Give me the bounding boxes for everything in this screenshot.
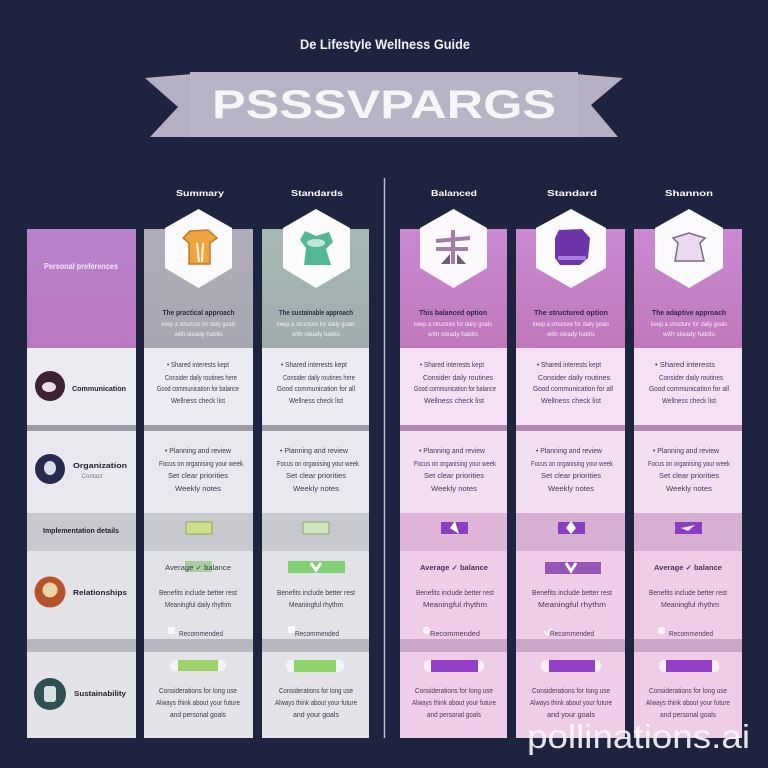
row 3 text — [277, 590, 355, 609]
header text — [162, 310, 236, 338]
icon: row 3 — [34, 576, 66, 608]
row 2 text: Weekly notes — [431, 486, 478, 493]
row 4 text: and personal goals — [427, 712, 481, 719]
checkbox item — [658, 627, 713, 638]
row 2 text: • Planning and review — [165, 448, 232, 455]
row 2 text: Focus on organising your week — [414, 461, 496, 468]
header text: keep a structure for daily goals — [651, 321, 728, 328]
column label: Balanced — [431, 189, 477, 198]
header text: with steady habits — [546, 331, 596, 338]
row 3 text — [416, 590, 494, 609]
row 4 text: and personal goals — [170, 712, 226, 719]
row 2 text: Focus on organising your week — [648, 461, 730, 468]
row 1 text: Wellness check list — [171, 398, 225, 405]
row 1 text: Consider daily routines — [659, 375, 723, 382]
label: heading: Personal preferences — [44, 262, 119, 271]
watermark: pollinations.ai — [527, 718, 750, 755]
row 3 text: Meaningful daily rhythm — [165, 602, 231, 609]
row 4 text: Always think about your future — [275, 700, 357, 707]
tag with check: Average ✓ balance — [165, 565, 231, 572]
row 3 text: Benefits include better rest — [159, 590, 237, 597]
row 2 text: Focus on organising your week — [159, 461, 243, 468]
row 4 text: Considerations for long use — [415, 688, 493, 695]
tag with check: Average ✓ balance — [420, 565, 488, 572]
label: row 2 — [73, 463, 127, 480]
header text: keep a structure for daily goals — [533, 321, 610, 328]
row 1 text: Consider daily routines here — [165, 375, 237, 382]
checkbox item: Recommended — [669, 631, 713, 638]
title: PSSSVPARGS — [212, 83, 556, 127]
title ribbon banner — [145, 72, 623, 137]
column 1: neutral — [144, 189, 253, 738]
row 2 text: Set clear priorities — [541, 473, 602, 480]
row 1 text: Good communication for balance — [414, 386, 496, 393]
hexagon icon: green bag — [283, 209, 350, 288]
row 2 text: • Planning and review — [419, 448, 486, 455]
row 3 text: Meaningful rhythm — [538, 602, 606, 609]
header text — [277, 310, 356, 338]
progress bar — [424, 660, 484, 672]
row 2 text: Weekly notes — [666, 486, 713, 493]
row 1 text: • Shared interests kept — [537, 362, 601, 369]
progress bar — [659, 660, 719, 672]
column 5: purple — [634, 189, 742, 738]
row 2 text: • Planning and review — [653, 448, 720, 455]
row 4 text — [156, 688, 240, 719]
row 2 text: Set clear priorities — [286, 473, 347, 480]
badge — [186, 522, 212, 534]
header text: The practical approach — [162, 310, 234, 317]
row 2 text: Weekly notes — [548, 486, 595, 493]
row 4 text: Considerations for long use — [649, 688, 727, 695]
label: row 1: Communication — [72, 386, 126, 393]
row 1 text: • Shared interests kept — [281, 362, 347, 369]
tag with check — [288, 561, 345, 573]
row 4 text: Considerations for long use — [532, 688, 610, 695]
row 1 text: • Shared interests kept — [167, 362, 229, 369]
center divider line — [384, 178, 386, 738]
hexagon icon: cross sign — [420, 209, 487, 288]
row 4 text — [530, 688, 612, 719]
row 3 text: Benefits include better rest — [416, 590, 494, 597]
header text — [651, 310, 728, 338]
row 3 text: Meaningful rhythm — [289, 602, 343, 609]
header text: keep a structure for daily goals — [277, 321, 356, 328]
row 4 text: and your goals — [293, 712, 339, 719]
label: band: Implementation details — [43, 528, 119, 535]
header text: keep a structure for daily goals — [414, 321, 493, 328]
label: row 3: Relationships — [73, 590, 127, 597]
row 1 text — [533, 362, 613, 405]
row 3 text: Benefits include better rest — [532, 590, 612, 597]
column label: Shannon — [665, 189, 713, 198]
row 2 text — [277, 448, 359, 493]
badge — [441, 521, 468, 534]
icon: row 4 — [34, 678, 66, 710]
column label: Summary — [176, 189, 225, 198]
hexagon icon: violet pouch — [536, 209, 606, 288]
row 1 text: Good communication for all — [277, 386, 355, 393]
label: row 4: Sustainability — [74, 691, 126, 698]
tag with check — [165, 561, 231, 572]
header text: with steady habits — [427, 331, 479, 338]
label: row 2: Organization — [73, 463, 127, 470]
row 2 text: Set clear priorities — [659, 473, 720, 480]
column label: Standards — [291, 189, 344, 198]
column 3: purple — [400, 189, 507, 738]
row 1 text — [277, 362, 355, 405]
progress bar — [286, 660, 344, 672]
checkbox item — [288, 626, 339, 638]
checkbox item: Recommended — [550, 631, 594, 638]
hexagon icon: lilac jar — [655, 209, 723, 288]
row 4 text: Considerations for long use — [279, 688, 353, 695]
row 1 text: Wellness check list — [289, 398, 343, 405]
row 2 text — [159, 448, 243, 493]
row 2 text: • Planning and review — [536, 448, 603, 455]
row 4 text: Always think about your future — [156, 700, 240, 707]
icon: row 1 — [35, 371, 65, 401]
row 1 text — [649, 362, 729, 405]
row 4 text: and personal goals — [660, 712, 716, 719]
header text: The structured option — [534, 310, 608, 317]
header text: This balanced option — [419, 310, 487, 317]
checkbox item — [544, 628, 594, 638]
row 4 text: Always think about your future — [412, 700, 496, 707]
row 1 text: Good communication for all — [533, 386, 613, 393]
header text — [414, 310, 493, 338]
row 2 text: Focus on organising your week — [531, 461, 613, 468]
row 1 text: • Shared interests kept — [420, 362, 484, 369]
row 1 text: Consider daily routines here — [283, 375, 355, 382]
row 3 text — [159, 590, 237, 609]
row 4 text — [646, 688, 730, 719]
subtitle: De Lifestyle Wellness Guide — [300, 36, 470, 52]
row 4 text: and your goals — [547, 712, 596, 719]
row 1 text: Wellness check list — [662, 398, 716, 405]
row 4 text: Always think about your future — [646, 700, 730, 707]
row 3 text — [649, 590, 727, 609]
row 1 text — [414, 362, 496, 405]
row 3 text: Benefits include better rest — [649, 590, 727, 597]
column label: Standard — [547, 189, 597, 198]
checkbox item: Recommended — [295, 631, 339, 638]
header text — [533, 310, 610, 338]
row 2 text: Weekly notes — [293, 486, 340, 493]
badge — [558, 521, 585, 534]
row 3 text: Meaningful rhythm — [423, 602, 487, 609]
badge — [675, 522, 702, 534]
column: row labels — [27, 229, 136, 738]
row 1 text: Consider daily routines — [538, 375, 611, 382]
checkbox item: Recommended — [430, 631, 480, 638]
header text: keep a structure for daily goals — [162, 321, 236, 328]
row 4 text — [275, 688, 357, 719]
row 2 text — [531, 448, 613, 493]
hexagon icon: orange shirt — [165, 209, 232, 288]
header text: with steady habits — [174, 331, 223, 338]
row 3 text: Benefits include better rest — [277, 590, 355, 597]
header text: with steady habits — [291, 331, 341, 338]
row 1 text: Wellness check list — [424, 398, 484, 405]
icon: row 2 — [35, 454, 65, 484]
column 2: teal — [262, 189, 369, 738]
row 1 text: Consider daily routines — [423, 375, 493, 382]
row 2 text — [648, 448, 730, 493]
row 3 text — [532, 590, 612, 609]
checkbox item: Recommended — [179, 631, 223, 638]
progress bar — [541, 660, 601, 672]
row 1 text: • Shared interests — [655, 362, 716, 369]
badge — [303, 522, 329, 534]
row 4 text: Considerations for long use — [159, 688, 237, 695]
header text: The adaptive approach — [652, 310, 726, 317]
row 4 text — [412, 688, 496, 719]
progress bar — [170, 660, 226, 671]
row 4 text: Always think about your future — [530, 700, 612, 707]
row 2 text: Weekly notes — [175, 486, 222, 493]
row 2 text: Set clear priorities — [424, 473, 485, 480]
header text: The sustainable approach — [279, 310, 353, 317]
checkbox item — [168, 627, 223, 638]
row 1 text — [157, 362, 239, 405]
row 2 text: Focus on organising your week — [277, 461, 359, 468]
row 2 text: • Planning and review — [280, 448, 349, 455]
label: row 2: Contact — [82, 474, 103, 480]
tag with check — [545, 562, 601, 574]
row 2 text — [414, 448, 496, 493]
row 1 text: Wellness check list — [541, 398, 601, 405]
column 4: purple — [516, 189, 625, 738]
row 2 text: Set clear priorities — [168, 473, 229, 480]
row 1 text: Good communication for all — [649, 386, 729, 393]
checkbox item — [423, 627, 480, 638]
tag with check: Average ✓ balance — [654, 565, 722, 572]
row 1 text: Good communication for balance — [157, 386, 239, 393]
header text: with steady habits — [662, 331, 716, 338]
row 3 text: Meaningful rhythm — [661, 602, 719, 609]
